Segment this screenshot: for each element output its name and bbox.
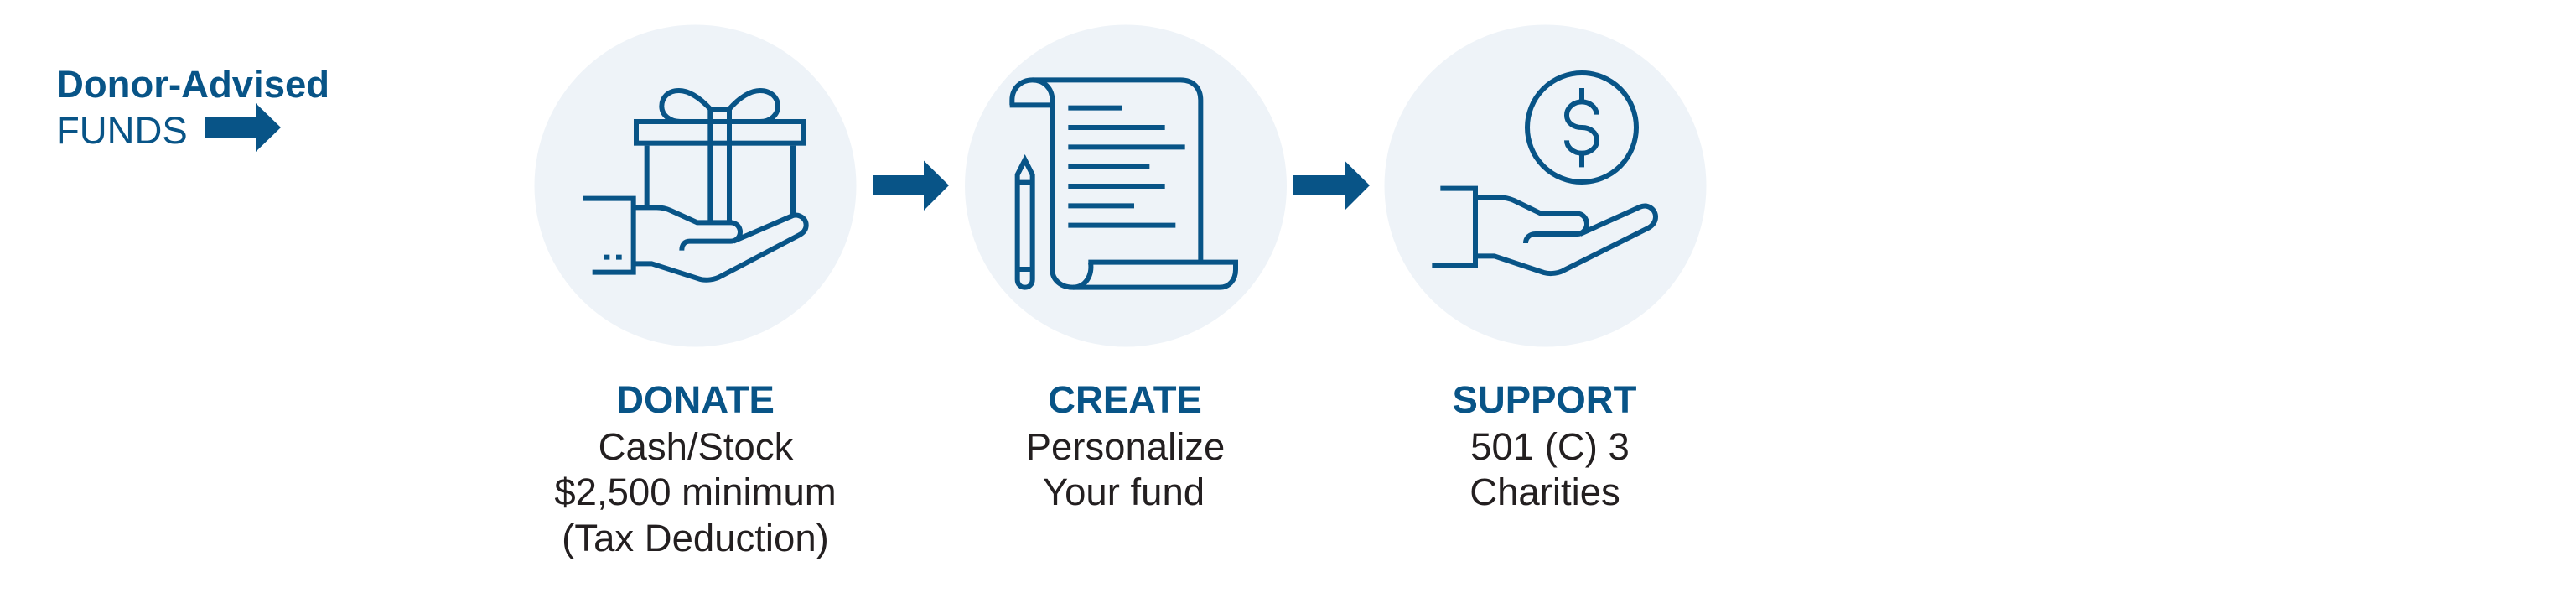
arrow: create to support <box>1293 161 1370 211</box>
text: Personalize: Personalize <box>1026 425 1225 468</box>
heading: Donor-Advised: Donor-Advised <box>56 63 329 106</box>
icon: scroll and pencil <box>1010 80 1236 288</box>
arrow: donate to create <box>873 161 949 211</box>
heading: DONATE: DONATE <box>616 378 775 421</box>
text: support <box>1453 378 1637 513</box>
panel: support <box>1385 25 1707 513</box>
heading: CREATE: CREATE <box>1048 378 1202 421</box>
header label: Donor-Advised Funds <box>56 63 329 152</box>
heading: SUPPORT: SUPPORT <box>1453 378 1637 421</box>
icon: hand with dollar coin <box>1432 73 1656 273</box>
panel: create <box>965 25 1287 513</box>
circle background: create <box>965 25 1287 347</box>
text: Your fund: Your fund <box>1043 471 1205 513</box>
text: 501 (C) 3: 501 (C) 3 <box>1470 425 1630 468</box>
circle background: donate <box>535 25 857 347</box>
icon: hand holding gift <box>583 91 806 280</box>
panel: donate <box>535 25 857 559</box>
text: Charities: Charities <box>1469 471 1620 513</box>
text: (Tax Deduction): (Tax Deduction) <box>562 517 829 559</box>
text: donate <box>554 378 837 559</box>
text: Cash/Stock: Cash/Stock <box>599 425 794 468</box>
heading: FUNDS: FUNDS <box>56 109 188 152</box>
text: $2,500 minimum: $2,500 minimum <box>554 471 837 513</box>
arrow: header <box>205 103 281 152</box>
circle background: support <box>1385 25 1707 347</box>
text: create <box>1026 378 1225 513</box>
